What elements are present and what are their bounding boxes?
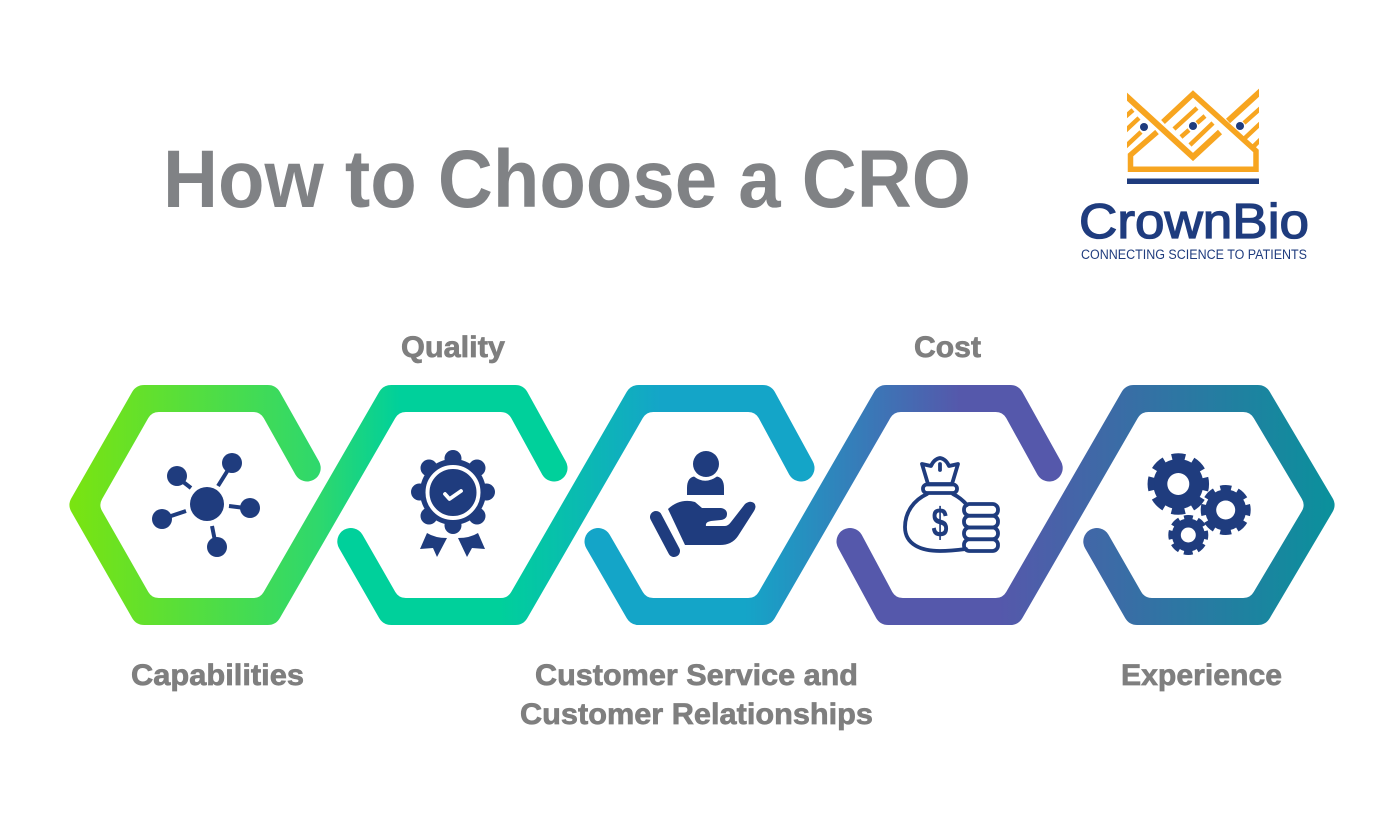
icon: gears [1151, 456, 1248, 553]
label: Quality: Quality [401, 331, 505, 364]
icon: money bag and coins [905, 458, 998, 551]
logo wordmark: CrownBio [1079, 195, 1309, 249]
hexagon 4 bottom with link to hexagon 5 [836, 385, 1335, 625]
icon: dollar sign: $ [932, 499, 948, 546]
icon: crown dots [1140, 122, 1244, 131]
hexagon 2 bottom with link to hexagon 3 top [337, 385, 815, 625]
title: How to Choose a CRO [163, 134, 971, 225]
hexagon 1 with link to hexagon 2 top [69, 385, 568, 625]
label: Cost: Cost [914, 331, 981, 364]
icon: quality badge [411, 450, 495, 557]
medium gear [1203, 488, 1248, 532]
icon: crown [1124, 90, 1262, 169]
icon: crown bar [1127, 178, 1259, 184]
label: Experience: Experience [1121, 659, 1282, 692]
large gear [1151, 456, 1206, 512]
label: Capabilities: Capabilities [131, 659, 304, 692]
logo tagline: CONNECTING SCIENCE TO PATIENTS [1081, 247, 1307, 262]
label: Customer Service and Customer Relationships [520, 659, 873, 731]
hexagon 3 bottom with link to hexagon 4 top [585, 385, 1063, 625]
label: Customer Service and Customer Relationships: Customer Service and [535, 659, 858, 692]
logo: CrownBio [1079, 90, 1309, 262]
label: Customer Service and Customer Relationships: Customer Relationships [520, 698, 873, 731]
hexagon chain [69, 385, 1335, 625]
small gear [1170, 517, 1206, 553]
icon: network [152, 453, 260, 557]
icon: person in hand [656, 451, 756, 551]
